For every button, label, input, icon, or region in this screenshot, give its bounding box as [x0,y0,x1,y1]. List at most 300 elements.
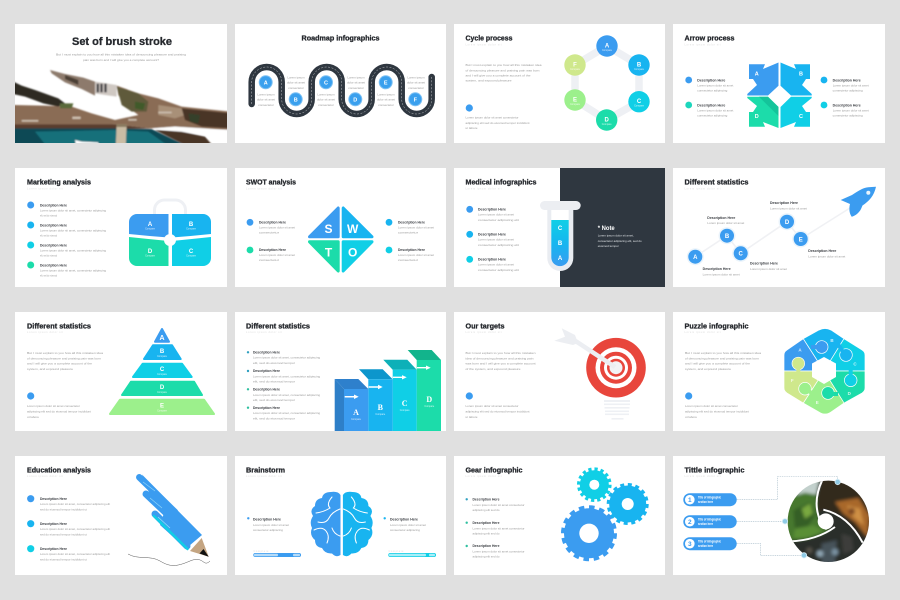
road captions: dolor sit amet [287,80,305,84]
puzzle hexagon: F [791,378,794,383]
milestone labels: Description Here [808,249,836,253]
right description [384,517,426,532]
road captions: consectetur [348,86,364,90]
title pill 3: 3 [688,541,692,548]
light bulb base [604,400,630,420]
test tube: A [558,256,563,262]
cycle diagram: Compare [602,49,613,52]
list item B: Description Here [40,224,67,228]
briefcase diagram: Compare [145,228,156,230]
description D: consectetur adipiscing [697,114,728,118]
stair chart: A [353,408,359,417]
description A: Description Here [478,208,506,212]
stair chart: C [402,399,408,408]
test tube [540,201,581,271]
cycle diagram: Compare [570,103,581,106]
puzzle hexagon: B [830,338,834,343]
connector nodes [782,479,840,558]
bullet item 1: elit, sed do eiusmod tempor [253,361,295,365]
note: eiusmod tempor [598,244,619,248]
panel: SWOT analysis [235,168,446,287]
milestones A to E: C [739,252,744,258]
description O: consectetur [398,258,418,262]
cycle diagram: E [573,98,577,104]
list item B: Lorem ipsum dolor sit amet, consectetur adipiscing elit [40,527,110,531]
panel: education analysis [15,456,227,575]
briefcase diagram: A [148,222,153,228]
note text: ut labore [466,126,478,130]
cycle diagram: C [637,99,642,105]
note text: Lorem ipsum dolor sit amet consectetur [466,404,518,408]
body paragraph: system, and expound pleasure [466,79,512,83]
note text: adipiscing elit sed do eiusmod tempor incididunt [685,410,749,414]
panel: arrow process [673,24,885,143]
body paragraph: system, and expound pleasure [27,367,73,371]
road markers A to F: C [324,80,328,86]
pyramid: Compare [157,355,168,358]
right description: Description Here [390,518,418,522]
cycle diagram: A [605,44,610,50]
subtitle: Lorem ipsum dolor sit [27,186,63,190]
brain icon [311,492,373,556]
body paragraph: and I will give you a complete account of the [27,362,92,366]
subtitle: Lorem ipsum dolor sit [466,186,502,190]
title pill 3: section here [698,544,713,548]
list item B: elit, sed do eiusmod [40,234,57,238]
description C: Lorem ipsum dolor sit amet [833,108,869,112]
bullet item 1 [247,350,320,365]
cycle diagram: D [605,118,610,124]
cycle diagram: Compare [634,68,645,71]
title pill 3 [683,537,737,550]
title pill 3: Title of infographic [698,540,721,544]
note text: adipiscing elit sed do eiusmod tempor incididunt [466,121,530,125]
cycle diagram: B [637,62,642,68]
panel: medical infographics [454,168,665,287]
list item A: sed do eiusmod tempor incididunt ut [40,508,87,512]
list item 3: Description Here [472,544,500,548]
body paragraph: of denouncing pleasure and praising pain was born [27,356,101,360]
body paragraph: But I must explain to you how all this mistaken [466,351,536,355]
description T [247,247,295,262]
intro text: But I must explain to you how all this mistaken idea of denouncing pleasure and praising [56,52,186,56]
road captions: dolor sit amet [377,98,395,102]
heading: different statistics: Different statistics [684,178,748,186]
list item D [27,262,106,278]
description B: consectetur adipiscing elit [478,243,519,247]
description A: Lorem ipsum dolor sit amet [697,84,733,88]
body paragraph: system, and expound pleasure [685,367,731,371]
description B: Lorem ipsum dolor sit amet [833,84,869,88]
road markers A to F: A [264,80,268,86]
title pill 1: 1 [688,497,692,504]
arrow block diagram: B [799,72,803,78]
subtitle: Lorem ipsum dolor sit [27,474,63,478]
road captions: Lorem ipsum [287,76,305,80]
description O [386,247,434,262]
body paragraph: of denouncing pleasure and praising pain was born [685,356,759,360]
puzzle hexagon: D [848,391,852,396]
large gear [564,508,614,559]
note [598,226,642,248]
stair chart [335,350,441,431]
bullet item 2 [247,369,320,384]
road markers A to F: D [353,97,357,103]
description S: Lorem ipsum dolor sit amet [259,226,295,230]
stair chart: Compare [351,418,362,421]
note text: ut labore [27,415,39,419]
dotted connectors [737,476,838,556]
description A [685,77,733,92]
list item 3: Lorem ipsum dolor sit amet consectetur [472,550,524,554]
bullet item 1: Description Here [253,350,280,354]
list item B [27,222,106,238]
note text: adipiscing elit sed do eiusmod tempor incididunt [27,410,91,414]
briefcase diagram [129,200,211,266]
description C [466,256,519,272]
milestone labels: Lorem ipsum dolor sit amet [808,254,845,258]
note text: adipiscing elit sed do eiusmod tempor incididunt [466,410,530,414]
title pill 2 [683,515,737,528]
stair chart: D [426,395,432,404]
subtitle: Lorem ipsum dolor sit [466,330,502,334]
description C: consectetur adipiscing [833,114,863,118]
milestone labels: Lorem ipsum dolor sit amet [707,221,744,225]
bullet item 3: elit, sed do eiusmod tempor [253,398,295,402]
right description: consectetur adipiscing [390,528,420,532]
list item 2: adipiscing elit sed do [472,531,500,535]
brush stroke photo [10,70,232,148]
heading: our targets: Our targets [466,322,504,330]
note icon [27,392,34,400]
body paragraph: of denouncing pleasure and praising pain was born [466,68,540,72]
pyramid: D [160,385,165,391]
note icon [466,392,473,400]
milestone labels [703,201,845,276]
milestones A to E: A [693,255,698,261]
body paragraph: idea of denouncing pleasure and praising pain [466,356,534,360]
pyramid: Compare [157,410,168,412]
description W: Lorem ipsum dolor sit amet [398,226,434,230]
description W [386,219,434,235]
heading: different statistics: Different statistics [246,322,310,330]
cycle diagram: Compare [634,104,645,108]
description A: consectetur adipiscing elit [478,218,519,222]
title pill 1: section here [698,500,713,504]
panel: pyramid statistics [15,312,227,431]
list item A: Lorem ipsum dolor sit amet, consectetur adipiscing elit [40,502,110,506]
milestone labels: Description Here [770,201,798,205]
road captions: dolor sit amet [257,98,275,102]
list item A: Description Here [40,497,67,501]
description C [821,102,869,118]
list item 2 [466,521,524,535]
subtitle: Lorem ipsum dolor sit [684,474,721,478]
small gear [579,469,610,500]
description T: consectetur [259,258,279,262]
list item A [27,495,110,512]
left progress bar: Complete [254,549,269,553]
heading: gear: Gear infographic [466,466,522,474]
description B: Description Here [833,78,861,82]
milestone labels: Lorem ipsum dolor sit amet [750,267,787,271]
description B: Description Here [478,232,506,236]
milestones A to E: B [725,234,730,240]
stair chart: Compare [375,413,386,416]
panel: roadmap infographics [235,24,446,143]
pencil scribble [128,554,210,566]
arrow in target [554,328,615,367]
arrow block diagram [747,62,812,128]
pyramid: E [160,404,164,410]
list item B: Description Here [40,522,67,526]
milestones A to E: D [785,220,790,226]
list item A: Description Here [40,204,67,208]
bullet item 1: Lorem ipsum dolor sit amet, consectetur adipiscing [253,356,320,360]
heading: different statistics: Different statistics [27,322,91,330]
cycle diagram [564,35,650,131]
milestone labels: Description Here [750,262,778,266]
SWOT diamond [310,208,372,271]
list item C: elit, sed do eiusmod [40,254,57,258]
road markers A to F: F [414,97,418,103]
road captions: consectetur [318,103,334,107]
list item B: Lorem ipsum dolor sit amet, consectetur adipiscing [40,229,106,233]
test tube: B [558,241,563,247]
note text: ut labore [466,415,478,419]
list item 1: adipiscing elit sed do [472,508,500,512]
panel: our targets [454,312,665,431]
panel: different statistics, rocket path [673,168,885,287]
left description [247,517,289,532]
rocket icon [841,187,876,217]
subtitle: Lorem ipsum dolor sit [466,474,502,478]
body paragraph: and I will give you a complete account of the [466,74,531,78]
bullet item 3: Description Here [253,388,280,392]
body paragraph [685,351,761,371]
heading: brainstorm: Brainstorm [246,466,285,474]
milestone labels: Description Here [707,216,735,220]
stair chart: B [378,403,384,412]
briefcase diagram: D [148,249,153,255]
panel: marketing analysis [15,168,227,287]
title pill 2: 2 [688,519,692,526]
heading: education: Education analysis [27,466,91,474]
note icon [466,104,473,112]
note text: ut labore [685,415,697,419]
subtitle: Lorem ipsum dolor sit [684,42,721,46]
panel: staircase statistics [235,312,446,431]
description W: Description Here [398,220,425,224]
subtitle: Lorem ipsum dolor sit [684,186,721,190]
title pill 1 [683,493,737,506]
list item D: Lorem ipsum dolor sit amet, consectetur adipiscing [40,269,106,273]
subtitle: Lorem ipsum dolor sit [246,474,282,478]
description S: consectetur [259,231,279,235]
list item 2: Lorem ipsum dolor sit amet consectetur [472,526,524,530]
SWOT diamond: W [347,222,359,236]
body paragraph: But I must explain to you how all this mistaken idea [466,63,542,67]
road captions: Lorem ipsum [317,92,335,96]
road markers A to F: E [384,80,388,86]
road markers A to F [259,75,422,106]
list item C: Description Here [40,547,67,551]
list item C: sed do eiusmod tempor incididunt ut [40,558,87,562]
subtitle: Lorem ipsum dolor sit [466,42,502,46]
road captions: Lorem ipsum [257,92,275,96]
list item B [27,520,110,536]
heading: arrow process: Arrow process [684,34,734,42]
note text [685,404,749,419]
note text: Lorem ipsum dolor sit amet consectetur [685,404,738,408]
description W: consectetur [398,231,418,235]
cycle diagram: Compare [602,123,612,126]
road captions: dolor sit amet [347,80,365,84]
step arrows [345,366,431,399]
puzzle hexagon: A [798,348,802,352]
road captions: consectetur [258,103,274,107]
intro text [56,52,186,62]
briefcase diagram: Compare [186,228,197,230]
milestone labels: Lorem ipsum dolor sit amet [703,272,740,276]
arrow block diagram: C [799,114,803,120]
arrow block diagram: D [755,114,759,120]
test tube: C [558,226,563,232]
list item A: Lorem ipsum dolor sit amet, consectetur adipiscing [40,209,106,213]
panel: brainstorm [235,456,446,575]
description B: consectetur adipiscing [833,88,863,92]
list item C: Description Here [40,244,67,248]
description A: Lorem ipsum dolor sit amet [478,212,514,216]
body paragraph [466,351,536,371]
subtitle: Lorem ipsum dolor sit [246,186,282,190]
bullet item 2: elit, sed do eiusmod tempor [253,380,295,384]
left description: consectetur adipiscing [253,528,283,532]
description O: Description Here [398,248,425,252]
list item C [27,545,110,562]
bullet item 3 [247,388,320,402]
heading: puzzle: Puzzle infographic [684,322,748,330]
milestone labels: Lorem ipsum dolor sit amet [770,206,807,210]
connecting path [695,208,850,257]
milestones A to E: E [799,237,803,243]
photo swirl [782,478,869,562]
target [586,338,646,398]
list item 3: adipiscing elit sed do [472,555,500,559]
panel: cycle process [454,24,665,143]
panel: puzzle infographic [673,312,885,431]
road captions [257,76,425,107]
list item C [27,242,106,258]
pyramid: C [160,367,165,373]
road captions: Lorem ipsum [347,76,365,80]
briefcase diagram: C [189,249,194,255]
subtitle: Lorem ipsum dolor sit [684,330,721,334]
body paragraph: of the system, and expound pleasure [466,367,521,371]
description D [685,102,733,118]
milestones A to E [687,213,809,265]
description T: Lorem ipsum dolor sit amet [259,253,295,257]
puzzle hexagon: C [853,362,857,366]
title pill 2: Title of infographic [698,518,721,522]
list item A: elit, sed do eiusmod [40,214,57,218]
description C: Description Here [833,104,861,108]
note text [466,116,530,130]
description A [466,206,519,222]
heading: set of brush stroke: Set of brush stroke [72,36,172,48]
description D: Lorem ipsum dolor sit amet [697,108,733,112]
road captions: dolor sit amet [407,80,425,84]
road captions: dolor sit amet [317,98,335,102]
milestone labels: Description Here [703,267,731,271]
description C: consectetur adipiscing elit [478,268,519,272]
briefcase diagram: B [189,222,194,228]
note: Lorem ipsum dolor sit amet, [598,234,634,238]
briefcase diagram: Compare [145,254,156,258]
bullet item 4: elit, sed do eiusmod tempor [253,416,295,420]
description B: Lorem ipsum dolor sit amet [478,238,514,242]
puzzle hexagon: E [816,400,819,405]
heading: marketing analysis: Marketing analysis [27,178,91,186]
bullet item 2: Lorem ipsum dolor sit amet, consectetur adipiscing [253,374,320,378]
pyramid: B [160,349,165,355]
note text: Lorem ipsum dolor sit amet consectetur [466,116,518,120]
left description: Description Here [253,518,281,522]
arrow block diagram: A [755,72,759,78]
description B [466,231,519,247]
body paragraph: But I must explain to you how all this mistaken idea [685,351,761,355]
body paragraph: But I must explain to you how all this mistaken idea [27,351,103,355]
stair chart: Compare [400,409,410,412]
description D: Description Here [697,104,725,108]
road [252,67,432,114]
description C: Description Here [478,258,506,262]
list item 2: Description Here [472,521,500,525]
road captions: consectetur [378,103,394,107]
panel: set of brush stroke [10,24,232,148]
SWOT diamond: T [325,246,333,260]
bullet item 4 [247,406,320,420]
subtitle: Lorem ipsum dolor sit [27,330,63,334]
bullet item 4: Description Here [253,406,280,410]
list item 1 [466,498,524,512]
road captions: Lorem ipsum [407,76,425,80]
heading: medical: Medical infographics [466,178,536,186]
list item C: Lorem ipsum dolor sit amet, consectetur adipiscing elit [40,552,110,556]
description C: Lorem ipsum dolor sit amet [478,262,514,266]
heading: roadmap: Roadmap infographics [302,34,380,42]
body paragraph: and I will give you a complete account of the [685,362,750,366]
title pill 2: section here [698,522,713,526]
note: * Note [598,226,615,232]
subtitle: Lorem ipsum dolor sit [246,330,282,334]
left progress bar [253,549,301,557]
SWOT diamond: O [348,246,357,260]
body paragraph: was born and I will give you a complete account [466,362,536,366]
note text [27,404,91,419]
note: consectetur adipiscing elit, sed do [598,239,642,243]
road captions: consectetur [408,86,424,90]
description S: Description Here [259,220,286,224]
note text: Lorem ipsum dolor sit amet consectetur [27,404,80,408]
description A: consectetur adipiscing [697,88,728,92]
road markers A to F: B [294,97,298,103]
list item 3 [466,544,524,559]
list item D: elit, sed do eiusmod [40,274,57,278]
intro text: pain was born and I will give you a complete account? [83,58,159,62]
list item B: sed do eiusmod tempor incididunt ut [40,532,87,536]
road captions: Lorem ipsum [377,92,395,96]
